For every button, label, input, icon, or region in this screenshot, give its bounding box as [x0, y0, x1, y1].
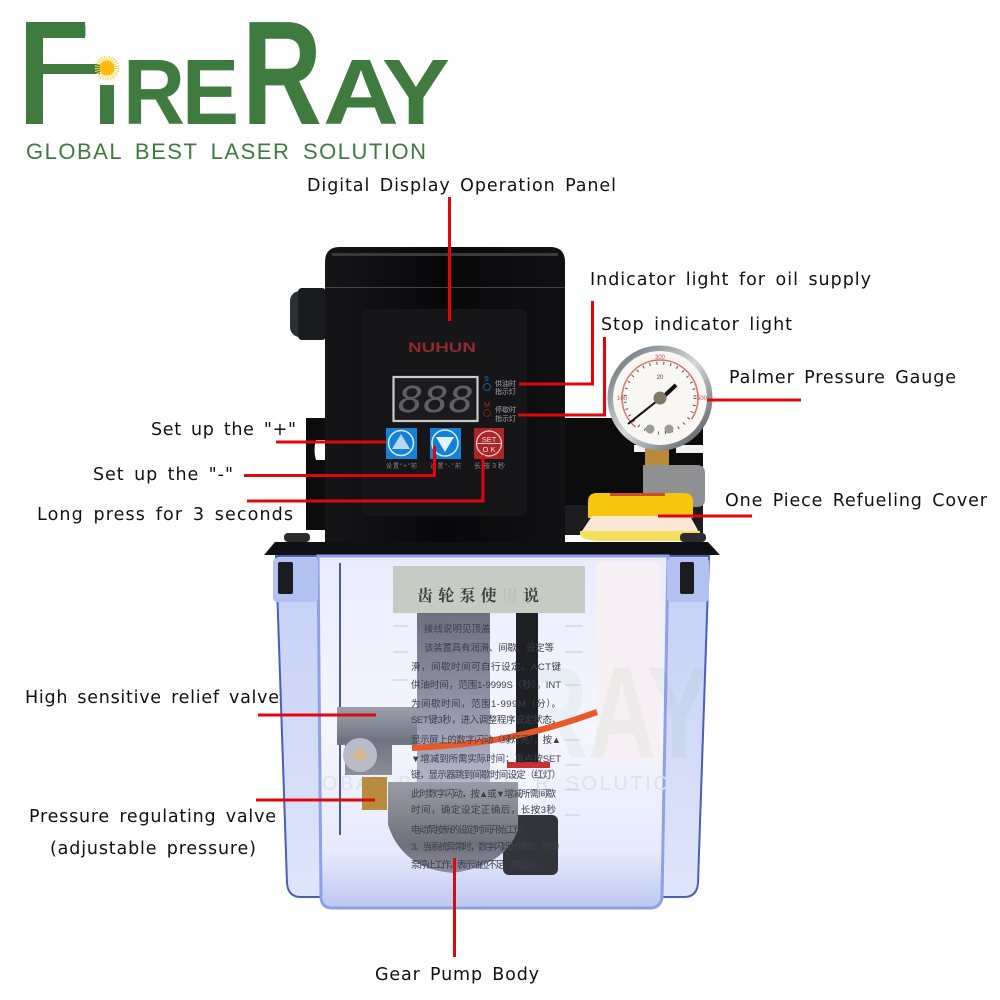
callout: high sensitive relief valve: High sensitive relief valve [25, 688, 279, 708]
watermark logo: RAY [520, 639, 710, 785]
level scale [393, 626, 583, 815]
callout: long press for 3 seconds: Long press for 3 seconds [37, 505, 293, 525]
pump base [388, 782, 518, 873]
logo: FireRay: E [182, 40, 239, 144]
instruction text: 接线说明见顶盖 [424, 623, 491, 635]
callout: set up minus [93, 446, 434, 485]
pressure gauge: 20 [657, 375, 664, 381]
callout: digital display operation panel: Digital Display Operation Panel [307, 176, 616, 196]
callout: pressure regulating valve [29, 800, 375, 859]
button: set ok: 长按3秒 [474, 461, 505, 470]
callout: set up minus: Set up the "-" [93, 465, 233, 485]
indicator labels: S [484, 376, 489, 383]
indicator labels [484, 376, 516, 423]
icon: sun [98, 58, 116, 78]
indicator labels: 指示灯 [495, 387, 516, 396]
button: plus [386, 428, 417, 470]
pressure gauge: 100 [617, 396, 628, 402]
indicator labels: 停歇时 [495, 405, 516, 414]
callout: indicator light for oil supply [519, 270, 871, 384]
instruction text: 显示屏上的数字闪动（绿灯亮），按▲ [411, 734, 561, 746]
logo: FireRay: R [123, 40, 185, 144]
logo: FireRay: Y [382, 40, 450, 144]
instruction text: ▼增减到所需实际时间；再点按SET [411, 753, 561, 765]
indicator labels: 指示灯 [495, 414, 516, 423]
cable gland [290, 288, 326, 340]
callout: indicator light for oil supply: Indicator light for oil supply [590, 270, 871, 290]
tank watermark: GLOBAL BEST LASER SOLUTION [290, 773, 686, 795]
button: minus [430, 428, 461, 470]
callout: pressure regulating valve: (adjustable pressure) [50, 839, 256, 859]
instruction text: SET键3秒，进入调整程序设定状态， [411, 714, 561, 726]
button: set ok: SET [482, 435, 497, 444]
instruction text: 时间，确定设定正确后，长按3秒 [411, 804, 556, 816]
suction tube [516, 613, 538, 765]
tank streak [339, 563, 341, 835]
indicator labels: 供油时 [495, 379, 516, 388]
operation panel [362, 309, 527, 516]
refueling cover [580, 493, 700, 541]
pressure gauge [606, 344, 714, 507]
instruction text: 滑，间歇时间可自行设定。ACT键 [411, 661, 561, 673]
relief valve [337, 707, 417, 810]
filter [503, 815, 558, 875]
callout: pressure regulating valve: Pressure regulating valve [29, 807, 276, 827]
pressure gauge: 500 [697, 396, 708, 402]
pressure gauge: 300 [655, 355, 666, 361]
instruction text: 泵停止工作，表示油位不足，需加油； [411, 859, 543, 871]
callout: long press for 3 seconds [37, 455, 483, 525]
instruction text: 键，显示器跳到间歇时间设定（红灯） [411, 769, 561, 781]
instruction text: 为间歇时间，范围1-999M（分）。 [411, 698, 561, 710]
instruction text: 该装置具有润滑、间歇、设定等 [424, 642, 554, 654]
label sheet: 齿轮泵使 用 说 [417, 583, 539, 606]
instruction text [411, 623, 561, 871]
callout: one piece refueling cover: One Piece Refueling Cover [725, 491, 988, 511]
indicator labels: M [484, 402, 490, 409]
callout: gear pump body: Gear Pump Body [375, 965, 539, 985]
pump column [417, 610, 490, 782]
button: minus: 设置"-"前 [430, 462, 461, 470]
instruction text: 供油时间，范围1-9999S（秒）。INT [411, 679, 561, 691]
LED display: 888 [398, 380, 474, 421]
button: plus: 设置"+"前 [386, 462, 417, 470]
top plate [264, 533, 720, 555]
transparent oil tank [273, 556, 710, 908]
control box [325, 247, 565, 544]
label sheet [393, 566, 585, 613]
pale back tube [596, 562, 660, 762]
logo tagline: GLOBAL BEST LASER SOLUTION [26, 139, 426, 164]
button: set ok: O K [483, 445, 495, 454]
mounting bracket [306, 418, 703, 535]
brand mark: NUHUN [408, 339, 476, 355]
callout: stop indicator light [518, 315, 792, 415]
product: lubrication pump [264, 247, 720, 908]
logo: FireRay: A [323, 40, 399, 144]
callout: set up plus: Set up the "+" [151, 420, 296, 440]
callout: palmer pressure gauge: Palmer Pressure Gauge [729, 368, 956, 388]
orange wire [412, 712, 597, 748]
logo: FireRay [20, 0, 450, 156]
instruction text: 此时数字闪动，按▲或▼增减所需间歇 [411, 788, 556, 800]
instruction text: 电动泵按新的设定时间开始工作。 [411, 824, 531, 836]
button: set ok [474, 428, 505, 470]
instruction text: 3、当系统异常时，数字闪烁并蜂鸣，电动 [411, 841, 559, 853]
callout: stop indicator light: Stop indicator light [601, 315, 792, 335]
